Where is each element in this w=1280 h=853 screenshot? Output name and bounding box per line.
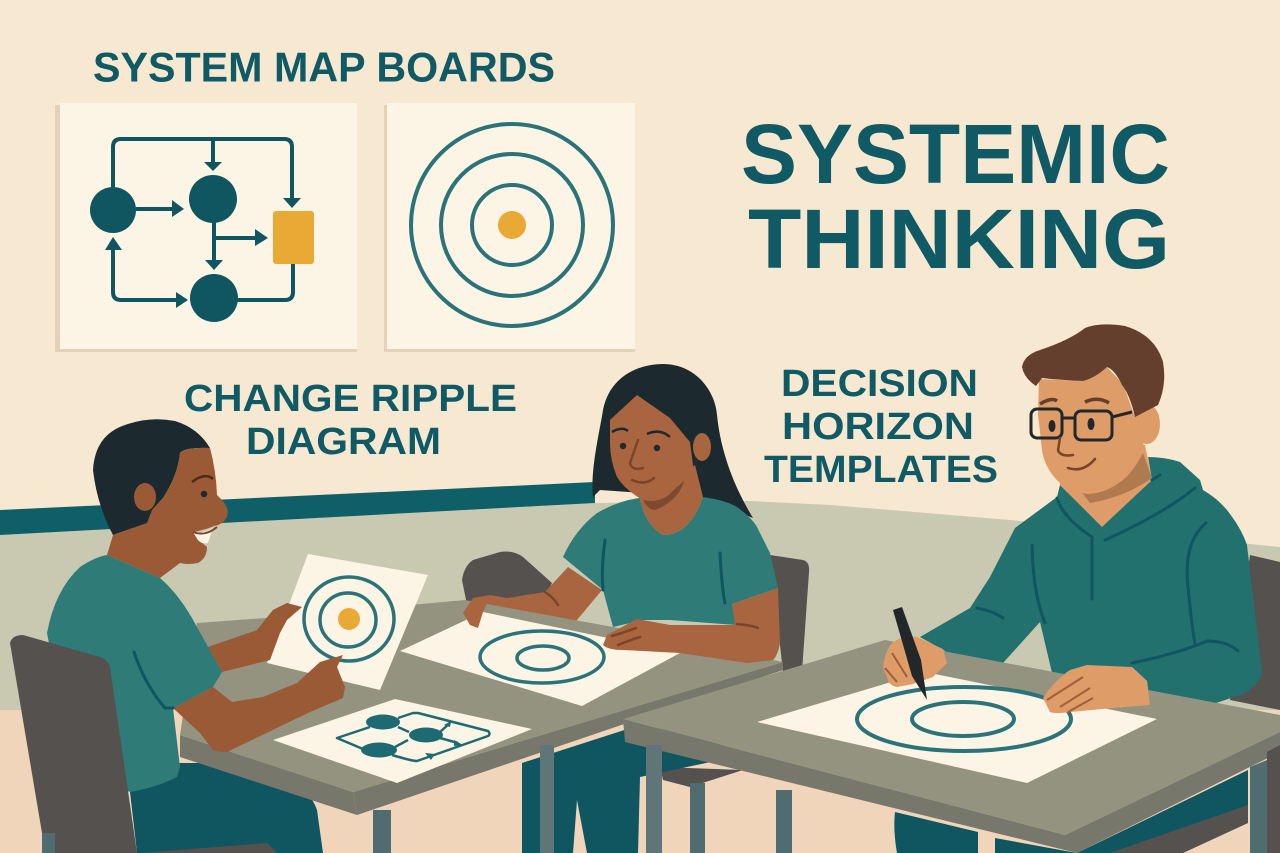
sheet: system map on table: [273, 699, 532, 783]
hands: left person's arms over sheet: [173, 603, 345, 752]
sheet: decision horizon template: [757, 672, 1157, 783]
held sheet: ripple diagram: [267, 554, 428, 690]
hands: woman over sheet: [463, 588, 780, 663]
title: THINKING: [748, 192, 1170, 286]
person: man on the right: [920, 324, 1280, 710]
hands and marker: right person: [883, 607, 1150, 713]
legs: right person: [894, 745, 1280, 853]
heading: decision horizon templates: HORIZON: [782, 406, 974, 448]
person: woman in the middle: [473, 364, 778, 627]
heading: decision horizon templates: [764, 363, 998, 491]
table: right: [623, 640, 1280, 853]
hand lines: woman: [612, 624, 758, 645]
person: man on the left: [47, 419, 323, 853]
chair: left person: [10, 635, 277, 853]
table: left: [180, 600, 783, 853]
chair: middle person: [462, 552, 809, 853]
sleeve: left person: [134, 627, 222, 708]
title: SYSTEMIC: [741, 107, 1170, 201]
panel: change ripple board: [384, 103, 635, 352]
heading: decision horizon templates: DECISION: [781, 363, 978, 405]
title: [741, 107, 1170, 286]
heading: change ripple diagram: DIAGRAM: [246, 421, 441, 463]
heading: decision horizon templates: TEMPLATES: [764, 449, 998, 491]
panel: system map board: [55, 103, 357, 352]
heading: change ripple diagram: [184, 378, 517, 463]
heading: system map boards: SYSTEM MAP BOARDS: [93, 44, 555, 90]
sheet: ripple diagram on table: [400, 612, 680, 706]
heading: change ripple diagram: CHANGE RIPPLE: [184, 378, 517, 420]
